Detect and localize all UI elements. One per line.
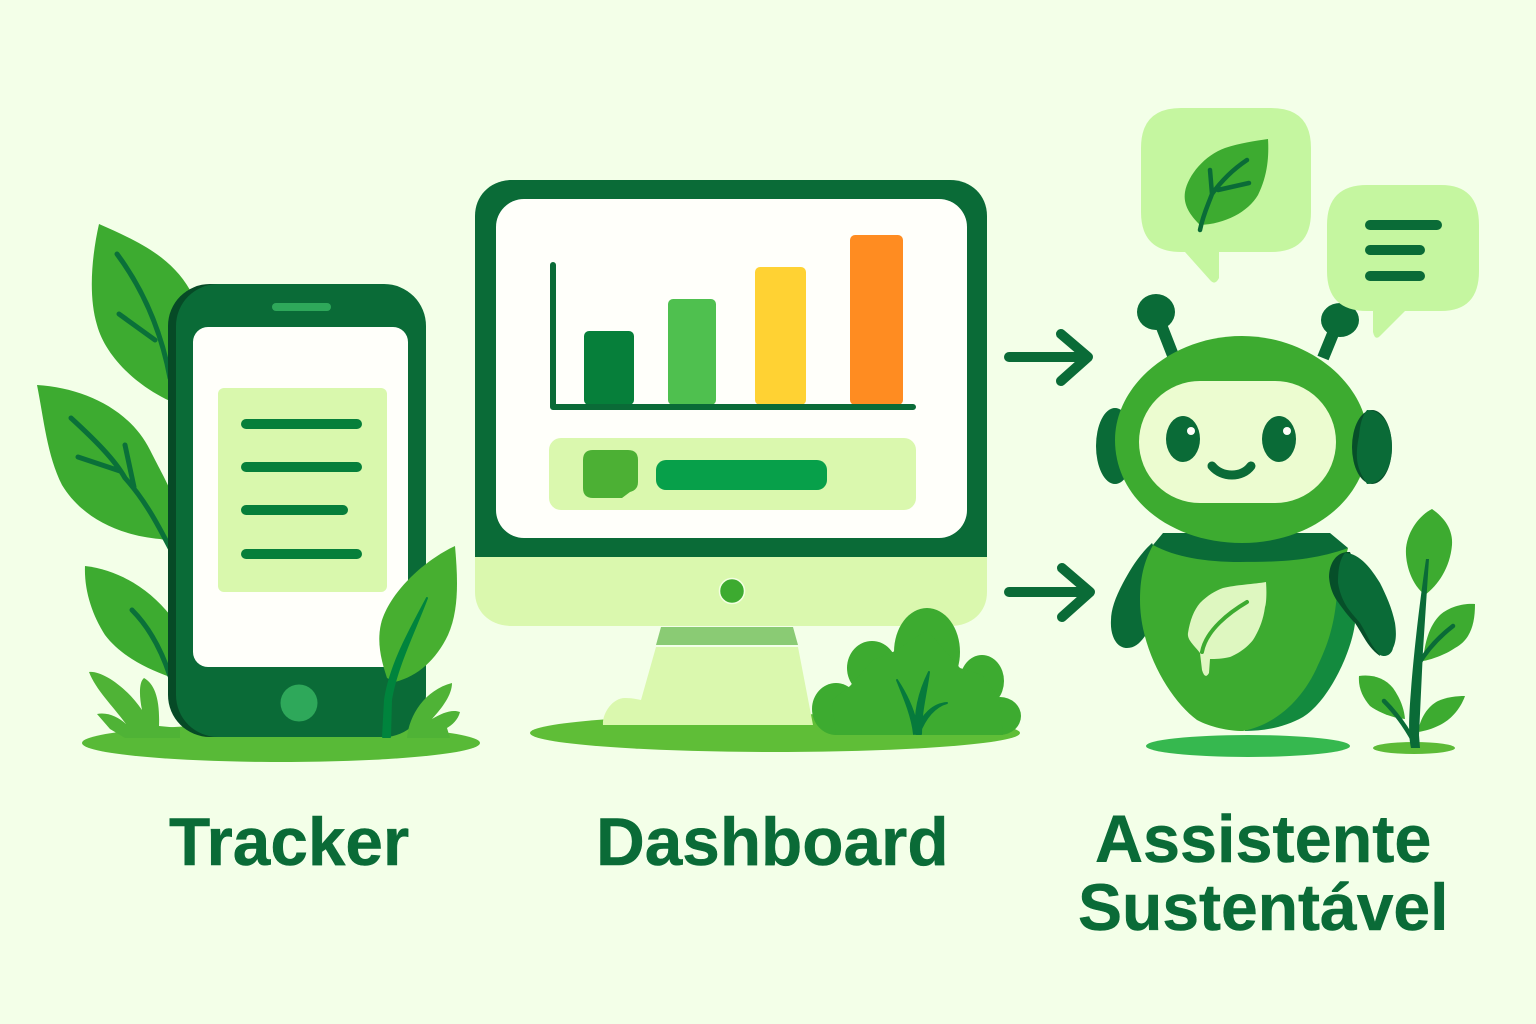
heading: Tracker: Tracker	[169, 805, 409, 880]
left arm	[1111, 543, 1160, 648]
icon: right grass tuft	[407, 683, 460, 738]
panel: sustainable assistant robot	[1096, 108, 1479, 757]
monitor chin	[475, 557, 987, 626]
phone screen	[193, 327, 408, 667]
speech bubble: leaf	[1141, 108, 1311, 283]
phone body	[168, 284, 426, 737]
arrow: dashboard to assistant upper	[1009, 334, 1088, 381]
phone speaker	[272, 303, 331, 311]
right ear	[1352, 410, 1392, 484]
left ear	[1096, 408, 1134, 484]
bar chart	[553, 235, 913, 407]
heading: Assistente Sustentável: Assistente	[1095, 803, 1431, 877]
phone content card	[218, 388, 387, 592]
robot smile	[1212, 466, 1251, 475]
ground	[82, 724, 480, 762]
heading: Assistente Sustentável: Sustentável	[1078, 870, 1448, 944]
heading: Dashboard: Dashboard	[596, 805, 949, 880]
speech bubble: text	[1327, 185, 1479, 338]
panel: tracker phone illustration	[37, 224, 480, 762]
robot eyes	[1166, 416, 1296, 462]
icon: upper leaf	[92, 224, 190, 401]
chest leaf	[1188, 582, 1266, 676]
antennas	[1137, 294, 1359, 358]
icon: bush	[812, 608, 1021, 735]
neck collar	[1153, 533, 1348, 562]
phone home button	[280, 684, 318, 722]
ground	[530, 714, 1020, 752]
robot face screen	[1139, 381, 1336, 503]
arrow: dashboard to assistant lower	[1009, 568, 1090, 617]
panel: dashboard monitor illustration	[475, 180, 1021, 752]
robot body	[1140, 533, 1355, 731]
heading: Assistente Sustentável	[1078, 803, 1448, 944]
dashboard status panel	[549, 438, 916, 510]
right arm	[1329, 552, 1396, 656]
monitor button	[720, 578, 744, 604]
monitor screen	[496, 199, 967, 538]
monitor stand	[603, 627, 813, 725]
icon: lower leaf	[85, 566, 170, 677]
icon: middle leaf	[37, 385, 170, 548]
icon: front leaf	[379, 546, 457, 737]
monitor frame	[475, 180, 987, 557]
icon: leaf	[1185, 139, 1268, 230]
icon: left grass tuft	[89, 672, 180, 738]
icon: small plant	[1359, 509, 1475, 754]
robot head	[1115, 336, 1368, 543]
robot shadow	[1146, 735, 1350, 757]
